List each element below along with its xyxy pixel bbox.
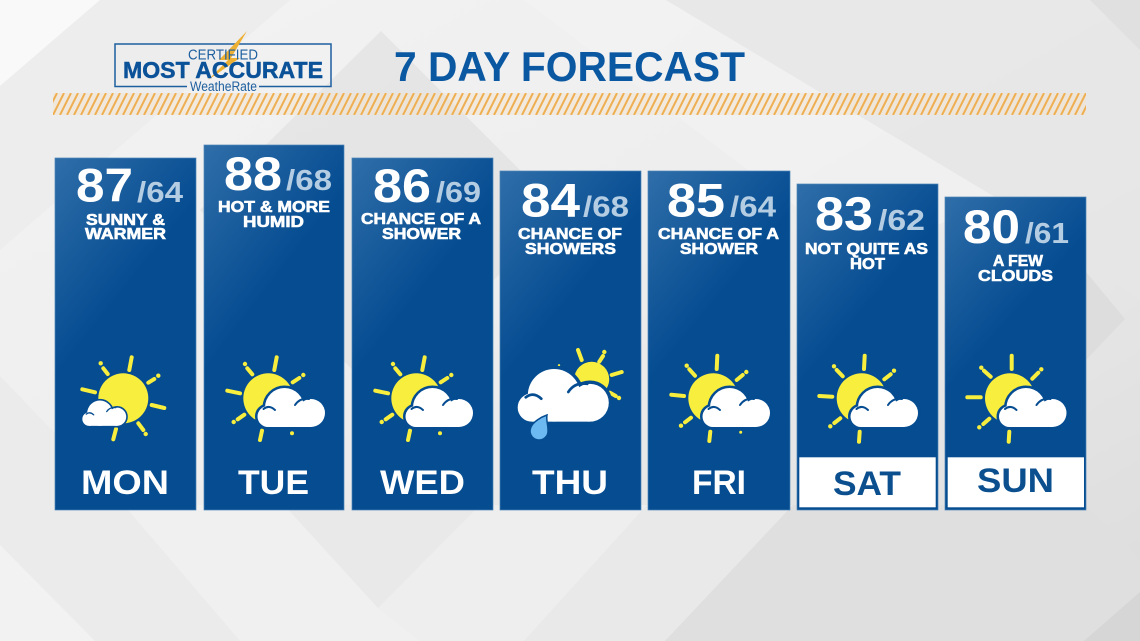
wednesday temperatures <box>373 159 481 212</box>
monday description: SUNNY & <box>86 212 165 229</box>
monday temperatures: 87 <box>76 158 133 212</box>
wednesday description <box>361 211 481 243</box>
icon: sun behind cloud <box>375 357 473 440</box>
thursday description: SHOWERS <box>525 241 616 258</box>
sunday temperatures: 80 <box>963 200 1020 253</box>
thursday temperatures: /68 <box>583 192 629 224</box>
friday temperatures <box>667 174 776 226</box>
icon: sun behind cloud <box>671 356 770 441</box>
monday description: WARMER <box>85 226 166 243</box>
panel: sunday <box>945 197 1086 510</box>
wednesday description: SHOWER <box>382 226 461 243</box>
saturday description <box>805 241 928 273</box>
wednesday temperatures: /69 <box>436 177 481 209</box>
friday temperatures: /64 <box>730 192 776 224</box>
friday label: FRI <box>692 464 746 502</box>
thursday label: THU <box>532 464 608 502</box>
tuesday temperatures <box>224 147 332 200</box>
tuesday description: HOT & MORE <box>218 199 330 216</box>
friday description: SHOWER <box>680 241 758 258</box>
saturday label box <box>799 457 936 507</box>
logo: certified most accurate: WeatheRate <box>190 79 257 94</box>
tuesday temperatures: 88 <box>224 147 282 200</box>
striped orange band <box>53 93 1086 115</box>
monday label: MON <box>81 464 169 502</box>
tuesday label: TUE <box>238 464 309 502</box>
panel: friday <box>648 171 790 510</box>
saturday temperatures: 83 <box>815 187 873 240</box>
thursday description <box>518 226 622 258</box>
monday temperatures: /64 <box>137 177 183 209</box>
tuesday temperatures: /68 <box>286 165 332 197</box>
panel: wednesday <box>352 158 493 510</box>
icon: lightning bolt <box>208 31 247 80</box>
sunday description: A FEW <box>993 253 1043 270</box>
friday description: CHANCE OF A <box>658 226 779 243</box>
logo: certified most accurate: MOST ACCURATE <box>123 57 323 83</box>
panel: saturday <box>797 184 938 510</box>
wednesday temperatures: 86 <box>373 159 431 212</box>
saturday description: NOT QUITE AS <box>805 241 928 258</box>
saturday temperatures: /62 <box>878 205 925 237</box>
title: 7 DAY FORECAST <box>394 43 745 90</box>
monday description <box>85 212 166 243</box>
friday description <box>658 226 779 258</box>
thursday description: CHANCE OF <box>518 226 622 243</box>
sunday temperatures: /61 <box>1025 218 1069 250</box>
icon: sun behind cloud <box>967 356 1066 442</box>
sunday description <box>978 253 1053 285</box>
sunday description: CLOUDS <box>978 268 1053 285</box>
icon: sun behind cloud <box>819 356 918 442</box>
monday temperatures <box>76 158 183 212</box>
thursday temperatures: 84 <box>521 174 580 226</box>
icon: sun with small cloud <box>82 357 164 439</box>
wednesday description: CHANCE OF A <box>361 211 481 228</box>
icon: cloud with sun and rain drop <box>518 350 622 440</box>
logo: certified most accurate: CERTIFIED <box>188 47 258 63</box>
tuesday description: HUMID <box>243 214 304 231</box>
thursday temperatures <box>521 174 629 226</box>
saturday label box: SAT <box>833 465 901 503</box>
friday temperatures: 85 <box>667 174 725 226</box>
saturday temperatures <box>815 187 925 240</box>
sunday temperatures <box>963 200 1069 253</box>
panel: monday <box>55 158 196 510</box>
tuesday description <box>218 199 330 231</box>
icon: sun behind cloud <box>227 357 325 440</box>
wednesday label: WED <box>380 464 465 502</box>
saturday description: HOT <box>850 256 886 273</box>
panel: thursday <box>500 171 641 510</box>
logo: certified most accurate <box>115 31 331 94</box>
icon: rain drop <box>530 415 548 440</box>
sunday label box: SUN <box>977 462 1054 500</box>
sunday label box <box>948 457 1084 507</box>
panel: tuesday <box>204 145 344 510</box>
